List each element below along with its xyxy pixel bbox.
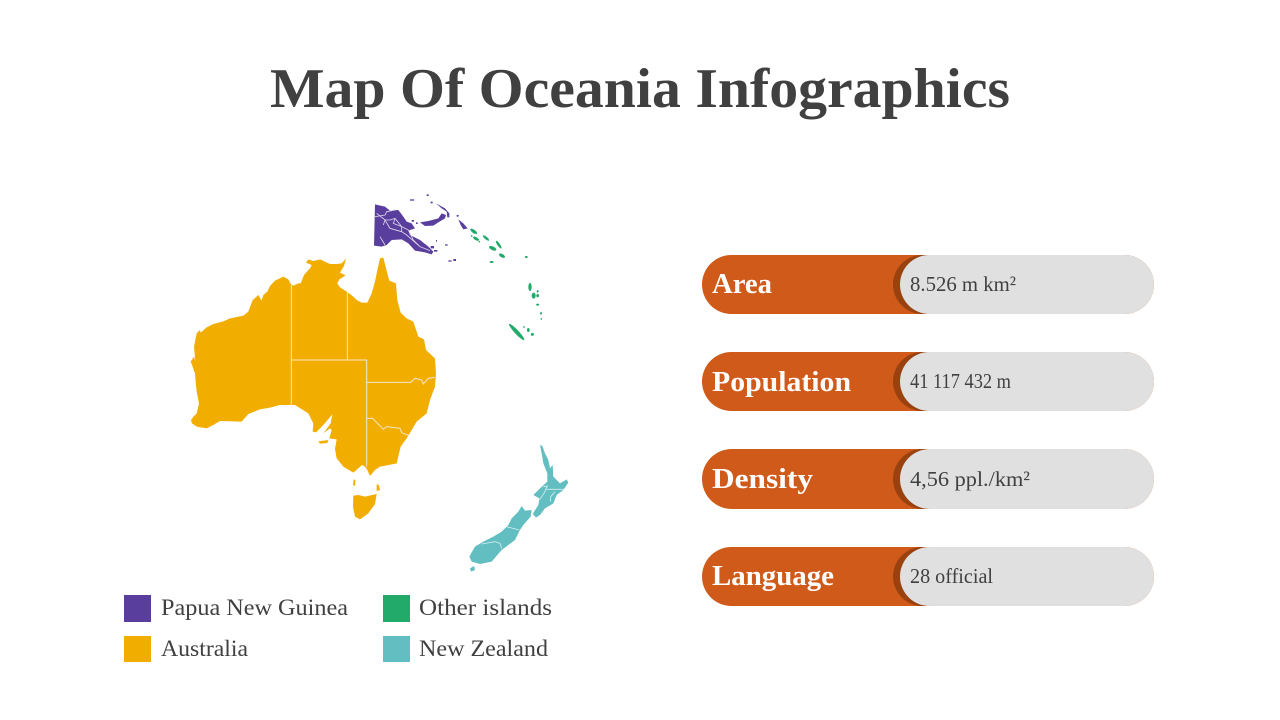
stat: Language: Language	[712, 561, 834, 592]
stat: Density: Density	[712, 464, 813, 495]
title: Map Of Oceania Infographics	[270, 58, 1010, 120]
stat: Language	[702, 547, 1154, 606]
stat: Population: Population	[712, 367, 851, 398]
stat: Population: 41 117 432 m	[910, 369, 1011, 393]
legend item: Australia	[124, 636, 248, 662]
map of Oceania	[191, 194, 568, 572]
region: New Zealand	[469, 445, 568, 572]
region: Australia	[191, 258, 436, 519]
legend	[124, 595, 552, 662]
stat: Density	[702, 449, 1154, 509]
legend item: New Zealand: New Zealand	[419, 636, 549, 661]
stat: Area: Area	[712, 269, 772, 300]
legend item: Australia: Australia	[161, 636, 248, 661]
stat: Area	[702, 255, 1154, 314]
stat: Population	[702, 352, 1154, 411]
legend item: Other islands	[383, 595, 552, 622]
region: other islands	[469, 228, 542, 341]
stat: Language: 28 official	[910, 564, 993, 588]
region: Papua New Guinea	[374, 194, 468, 262]
legend item: Papua New Guinea: Papua New Guinea	[161, 595, 348, 620]
legend item: Other islands: Other islands	[419, 595, 552, 620]
stat: Area: 8.526 m km²	[910, 272, 1016, 296]
stat: Density: 4,56 ppl./km²	[910, 467, 1030, 491]
